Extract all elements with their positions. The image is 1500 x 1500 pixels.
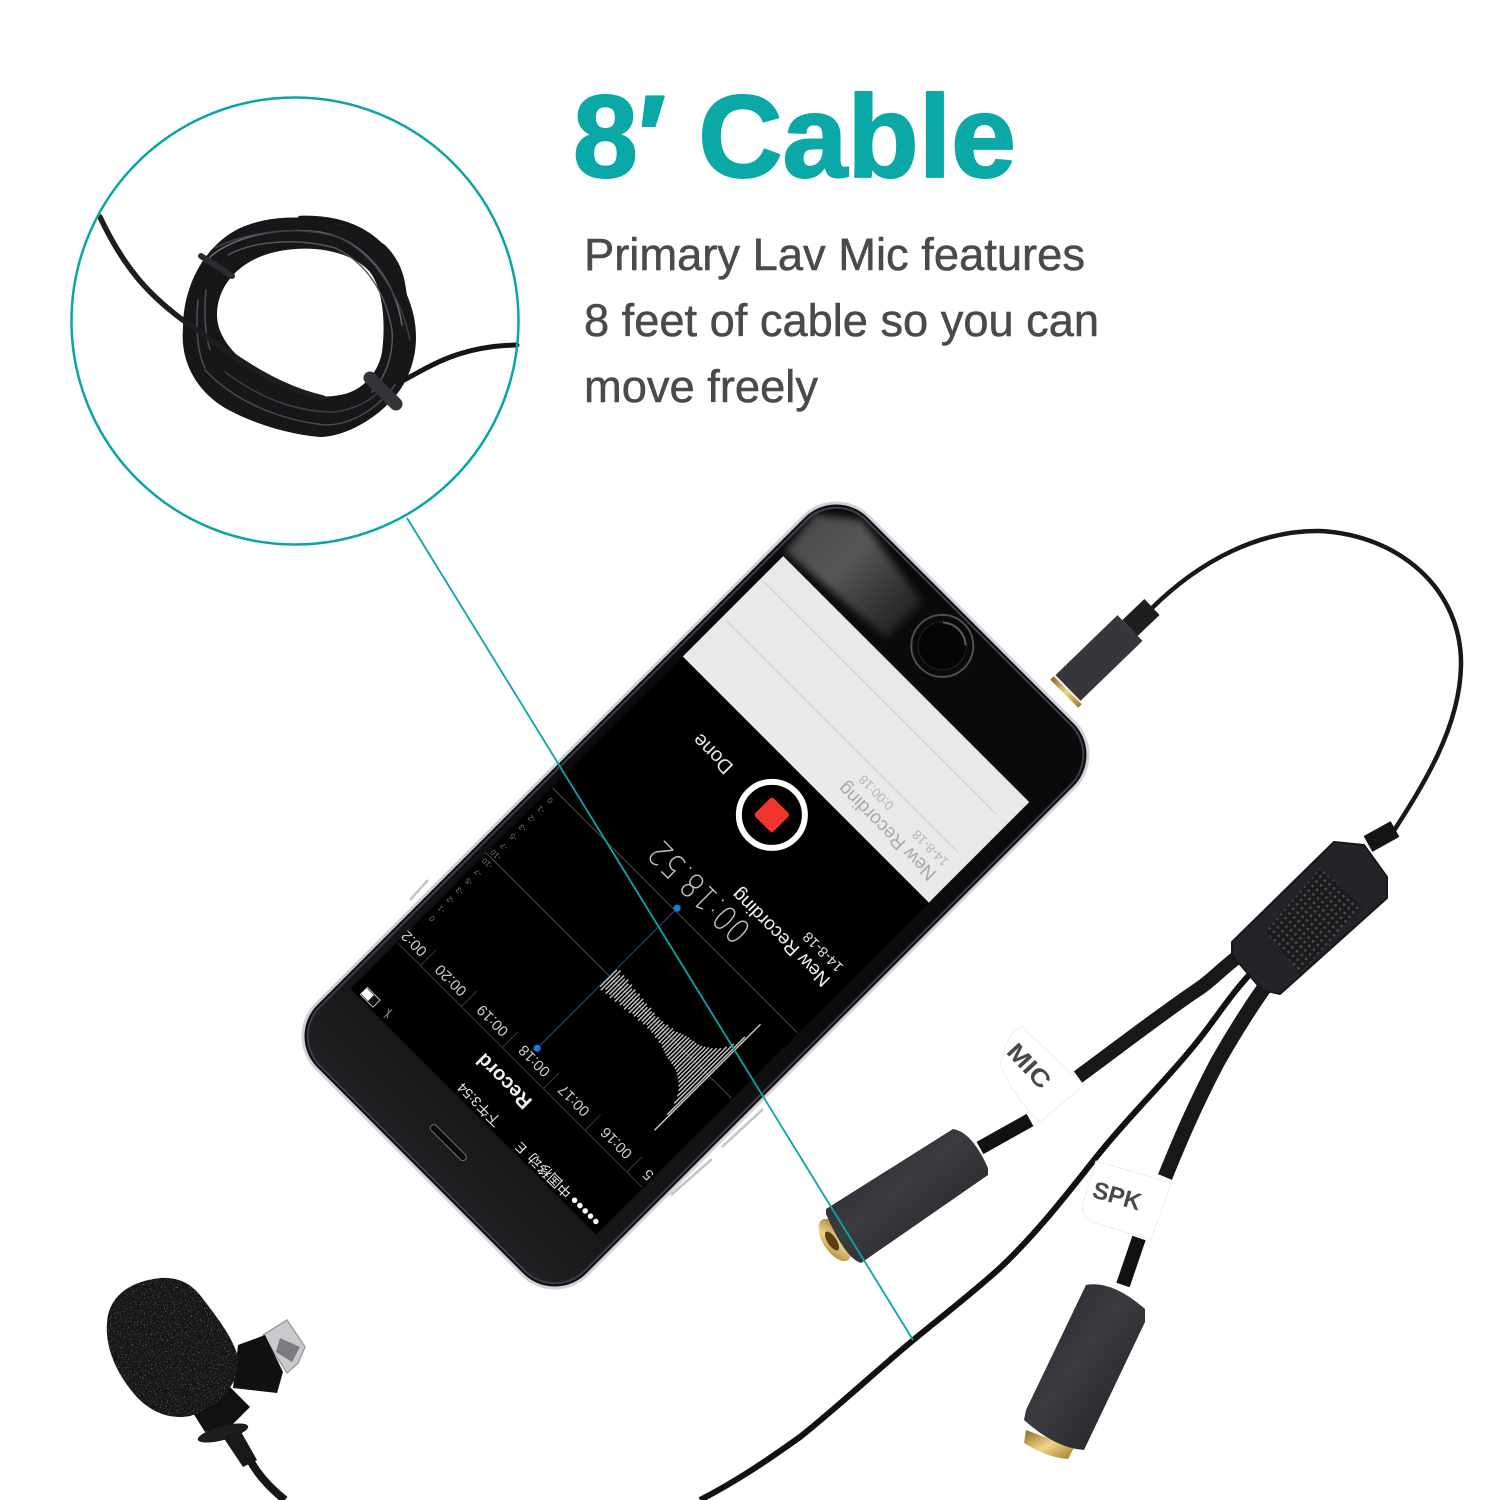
level scale: -3	[454, 885, 465, 897]
inner phone bezel	[290, 490, 1101, 1301]
level scale: -7	[498, 840, 510, 852]
level scale: -5	[507, 831, 519, 843]
level scale: -2	[526, 813, 538, 824]
callout leader line	[407, 518, 913, 1340]
time axis: 00:18	[515, 1041, 554, 1080]
time axis: 00:16	[597, 1123, 636, 1162]
speaker grille	[429, 1123, 468, 1162]
screen	[349, 555, 1029, 1235]
label: MIC: MIC	[1001, 1038, 1056, 1095]
timer: 00:18.52	[640, 832, 759, 951]
lav capsule base	[193, 1387, 257, 1467]
text block: cable description: 8 feet of cable so you can	[584, 295, 1099, 346]
level scale: -3	[517, 822, 528, 834]
heading: 8' Cable: 8′ Cable	[573, 71, 1016, 202]
recording list entry: 0:00:18	[856, 772, 897, 813]
playback cursor	[532, 903, 682, 1053]
lav cable	[250, 1460, 285, 1500]
waveform chart	[411, 782, 802, 1173]
circle outline callout	[72, 98, 518, 544]
time axis	[396, 925, 658, 1188]
lavalier microphone	[107, 1278, 305, 1500]
phone body	[284, 484, 1107, 1307]
thin cable leading off page	[700, 972, 1252, 1500]
status bar: 下午3:54	[454, 1079, 504, 1130]
cable: MIC branch	[1078, 955, 1240, 1077]
plug: jack in phone	[1052, 607, 1152, 706]
record stop button	[725, 768, 819, 862]
splitter mesh grip	[1266, 868, 1362, 974]
label: MIC	[1000, 1027, 1084, 1122]
status bar: E	[512, 1139, 530, 1157]
status bar: 中国移动	[524, 1150, 575, 1201]
home button	[898, 602, 986, 690]
white notes panel	[683, 556, 1029, 903]
level scale: -2	[444, 894, 456, 906]
text block: cable description: move freely	[584, 361, 818, 412]
recording list entry: 14-8-18	[909, 827, 951, 869]
coil body	[183, 217, 416, 437]
extra cable loop	[300, 218, 405, 300]
cable tie top	[201, 256, 232, 276]
label: SPK: SPK	[1089, 1177, 1145, 1216]
phone	[284, 484, 1107, 1307]
level scale: -7	[472, 866, 484, 878]
splitter housing	[1232, 829, 1395, 994]
label: SPK	[1082, 1161, 1171, 1240]
time axis: 00:20	[432, 961, 470, 999]
connector: MIC jack	[812, 1129, 988, 1267]
phone side buttons	[410, 880, 763, 1195]
level scale: 0	[427, 913, 437, 923]
recording title: New Recording	[728, 884, 835, 990]
right lead wire of coil	[400, 345, 517, 382]
done label: Done	[688, 729, 738, 778]
status bar	[358, 985, 601, 1228]
cable: from phone jack to splitter	[1150, 531, 1461, 840]
left lead wire of coil	[100, 217, 323, 398]
level scale	[424, 793, 557, 926]
record label: Record	[472, 1049, 537, 1113]
level scale: 0	[545, 795, 555, 805]
cable: SPK branch	[1165, 985, 1266, 1177]
photo: coiled cable inside circle	[100, 217, 517, 437]
time axis: 00:19	[474, 1001, 512, 1040]
text block: cable description	[584, 229, 1099, 412]
time axis: 00:2	[398, 927, 431, 960]
connector: SPK jack	[1024, 1284, 1145, 1459]
time axis: 00:17	[555, 1081, 594, 1119]
level scale: -10	[480, 856, 495, 871]
level scale: -5	[463, 876, 475, 887]
level scale: -10	[488, 847, 503, 862]
cable: SPK to jack	[1123, 1238, 1139, 1285]
lav clip	[233, 1320, 305, 1393]
fingerprint smudge	[782, 494, 933, 645]
time axis: 5	[640, 1165, 657, 1183]
text block: cable description: Primary Lav Mic features	[584, 229, 1085, 280]
cable tie bottom	[370, 378, 396, 404]
waveform bars	[555, 925, 761, 1130]
recording list entry: New Recording	[834, 777, 941, 884]
recording title: 14-8-18	[800, 928, 847, 975]
level scale: -1	[535, 804, 547, 815]
cable: MIC to jack	[980, 1120, 1030, 1148]
level scale: -1	[435, 903, 447, 915]
foam windscreen	[107, 1278, 238, 1417]
